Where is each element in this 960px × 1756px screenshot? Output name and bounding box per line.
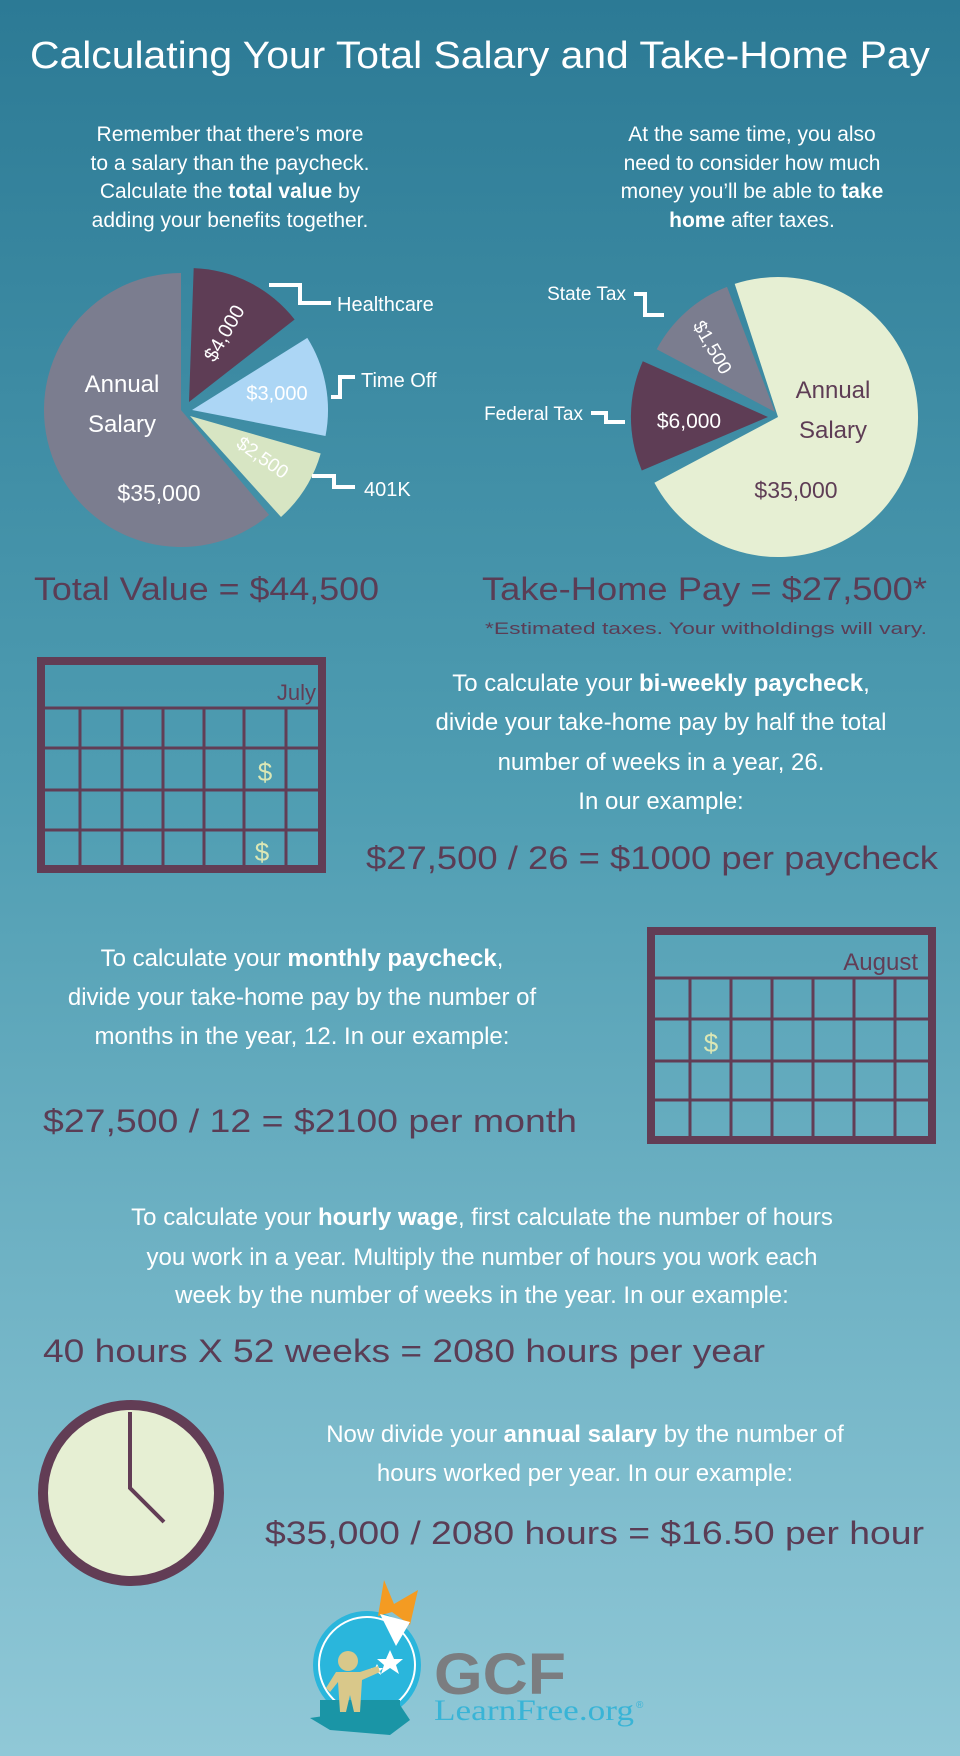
logo: GCF LearnFree.org	[310, 1580, 644, 1735]
text: bi-weekly paycheck: In our example:	[578, 788, 744, 815]
footnote: *Estimated taxes. Your witholdings will vary.	[485, 619, 927, 638]
formula: hours per year: 40 hours X 52 weeks = 2080 hours per year	[43, 1333, 765, 1369]
text: bi-weekly paycheck	[436, 670, 886, 815]
icon: August calendar: August	[843, 949, 918, 976]
text: total value intro: to a salary than the paycheck.	[90, 152, 370, 175]
icon: August calendar: $	[704, 1028, 719, 1058]
text: monthly paycheck	[68, 945, 536, 1050]
text: take-home intro	[621, 123, 883, 232]
chart: take-home pie: Annual	[796, 377, 870, 404]
icon: July calendar	[41, 661, 322, 869]
chart: take-home pie	[631, 277, 918, 557]
callout: 401K: 401K	[364, 479, 411, 501]
text: bi-weekly paycheck: To calculate your bi-weekly paycheck,	[452, 670, 870, 697]
chart: take-home pie: $1,500	[688, 317, 735, 378]
icon: August calendar	[651, 931, 932, 1140]
text: hourly wage: week by the number of weeks in the year. In our example:	[174, 1282, 789, 1309]
text: take-home intro: money you’ll be able to take	[621, 180, 883, 203]
callout: federal tax: Federal Tax	[484, 404, 583, 425]
icon: July calendar: July	[277, 680, 316, 705]
callout: time off	[331, 370, 437, 397]
formula: bi-weekly: $27,500 / 26 = $1000 per paycheck	[366, 840, 939, 876]
title: Calculating Your Total Salary and Take-Home Pay	[30, 35, 930, 77]
text: take-home intro: At the same time, you also	[628, 123, 876, 146]
chart: total value pie: $2,500	[232, 433, 292, 483]
text: bi-weekly paycheck: divide your take-home pay by half the total	[436, 709, 886, 736]
chart: take-home pie: $6,000	[657, 410, 721, 433]
chart: total value pie	[44, 268, 328, 547]
text: annual salary division	[326, 1421, 844, 1487]
logo: GCF LearnFree.org: GCF	[434, 1642, 566, 1707]
chart: total value pie: Annual	[85, 371, 159, 398]
text: total value intro: Remember that there’s more	[97, 123, 363, 146]
icon: July calendar: $	[258, 757, 273, 787]
callout: time off: Time Off	[361, 370, 437, 392]
logo: GCF LearnFree.org: ®	[636, 1700, 644, 1711]
text: bi-weekly paycheck: number of weeks in a year, 26.	[498, 749, 824, 776]
text: take-home intro: need to consider how much	[624, 152, 880, 175]
chart: total value pie: $3,000	[246, 383, 308, 405]
text: total value intro	[90, 123, 370, 232]
chart: take-home pie: Salary	[799, 417, 867, 444]
text: monthly paycheck: To calculate your monthly paycheck,	[101, 945, 503, 972]
text: monthly paycheck: months in the year, 12. In our example:	[95, 1023, 509, 1050]
text: total value intro: Calculate the total value by	[100, 180, 361, 203]
callout: state tax	[547, 284, 664, 315]
chart: total value pie: $4,000	[200, 302, 250, 365]
text: total value intro: adding your benefits together.	[92, 209, 368, 232]
text: take-home intro: home after taxes.	[669, 209, 835, 232]
chart: take-home pie: $35,000	[754, 477, 838, 503]
chart: total value pie: $35,000	[117, 480, 201, 506]
text: annual salary division: Now divide your annual salary by the number of	[326, 1421, 844, 1448]
formula: monthly: $27,500 / 12 = $2100 per month	[43, 1103, 577, 1139]
text: hourly wage	[131, 1204, 833, 1309]
take-home pay result: Take-Home Pay = $27,500*	[482, 571, 927, 607]
callout: state tax: State Tax	[547, 284, 626, 305]
icon: July calendar: $	[255, 837, 270, 867]
callout: healthcare	[269, 285, 434, 316]
logo: GCF LearnFree.org: LearnFree.org	[434, 1694, 634, 1727]
text: hourly wage: you work in a year. Multiply the number of hours you work each	[146, 1244, 818, 1271]
text: monthly paycheck: divide your take-home pay by the number of	[68, 984, 536, 1011]
icon: clock	[43, 1405, 219, 1581]
total value result: Total Value = $44,500	[34, 571, 379, 607]
callout: 401K	[312, 476, 411, 501]
chart: total value pie: Salary	[88, 411, 156, 438]
text: annual salary division: hours worked per year. In our example:	[377, 1460, 793, 1487]
formula: hourly wage: $35,000 / 2080 hours = $16.50 per hour	[265, 1515, 924, 1551]
text: hourly wage: To calculate your hourly wage, first calculate the number of hours	[131, 1204, 833, 1231]
callout: healthcare: Healthcare	[337, 294, 434, 316]
